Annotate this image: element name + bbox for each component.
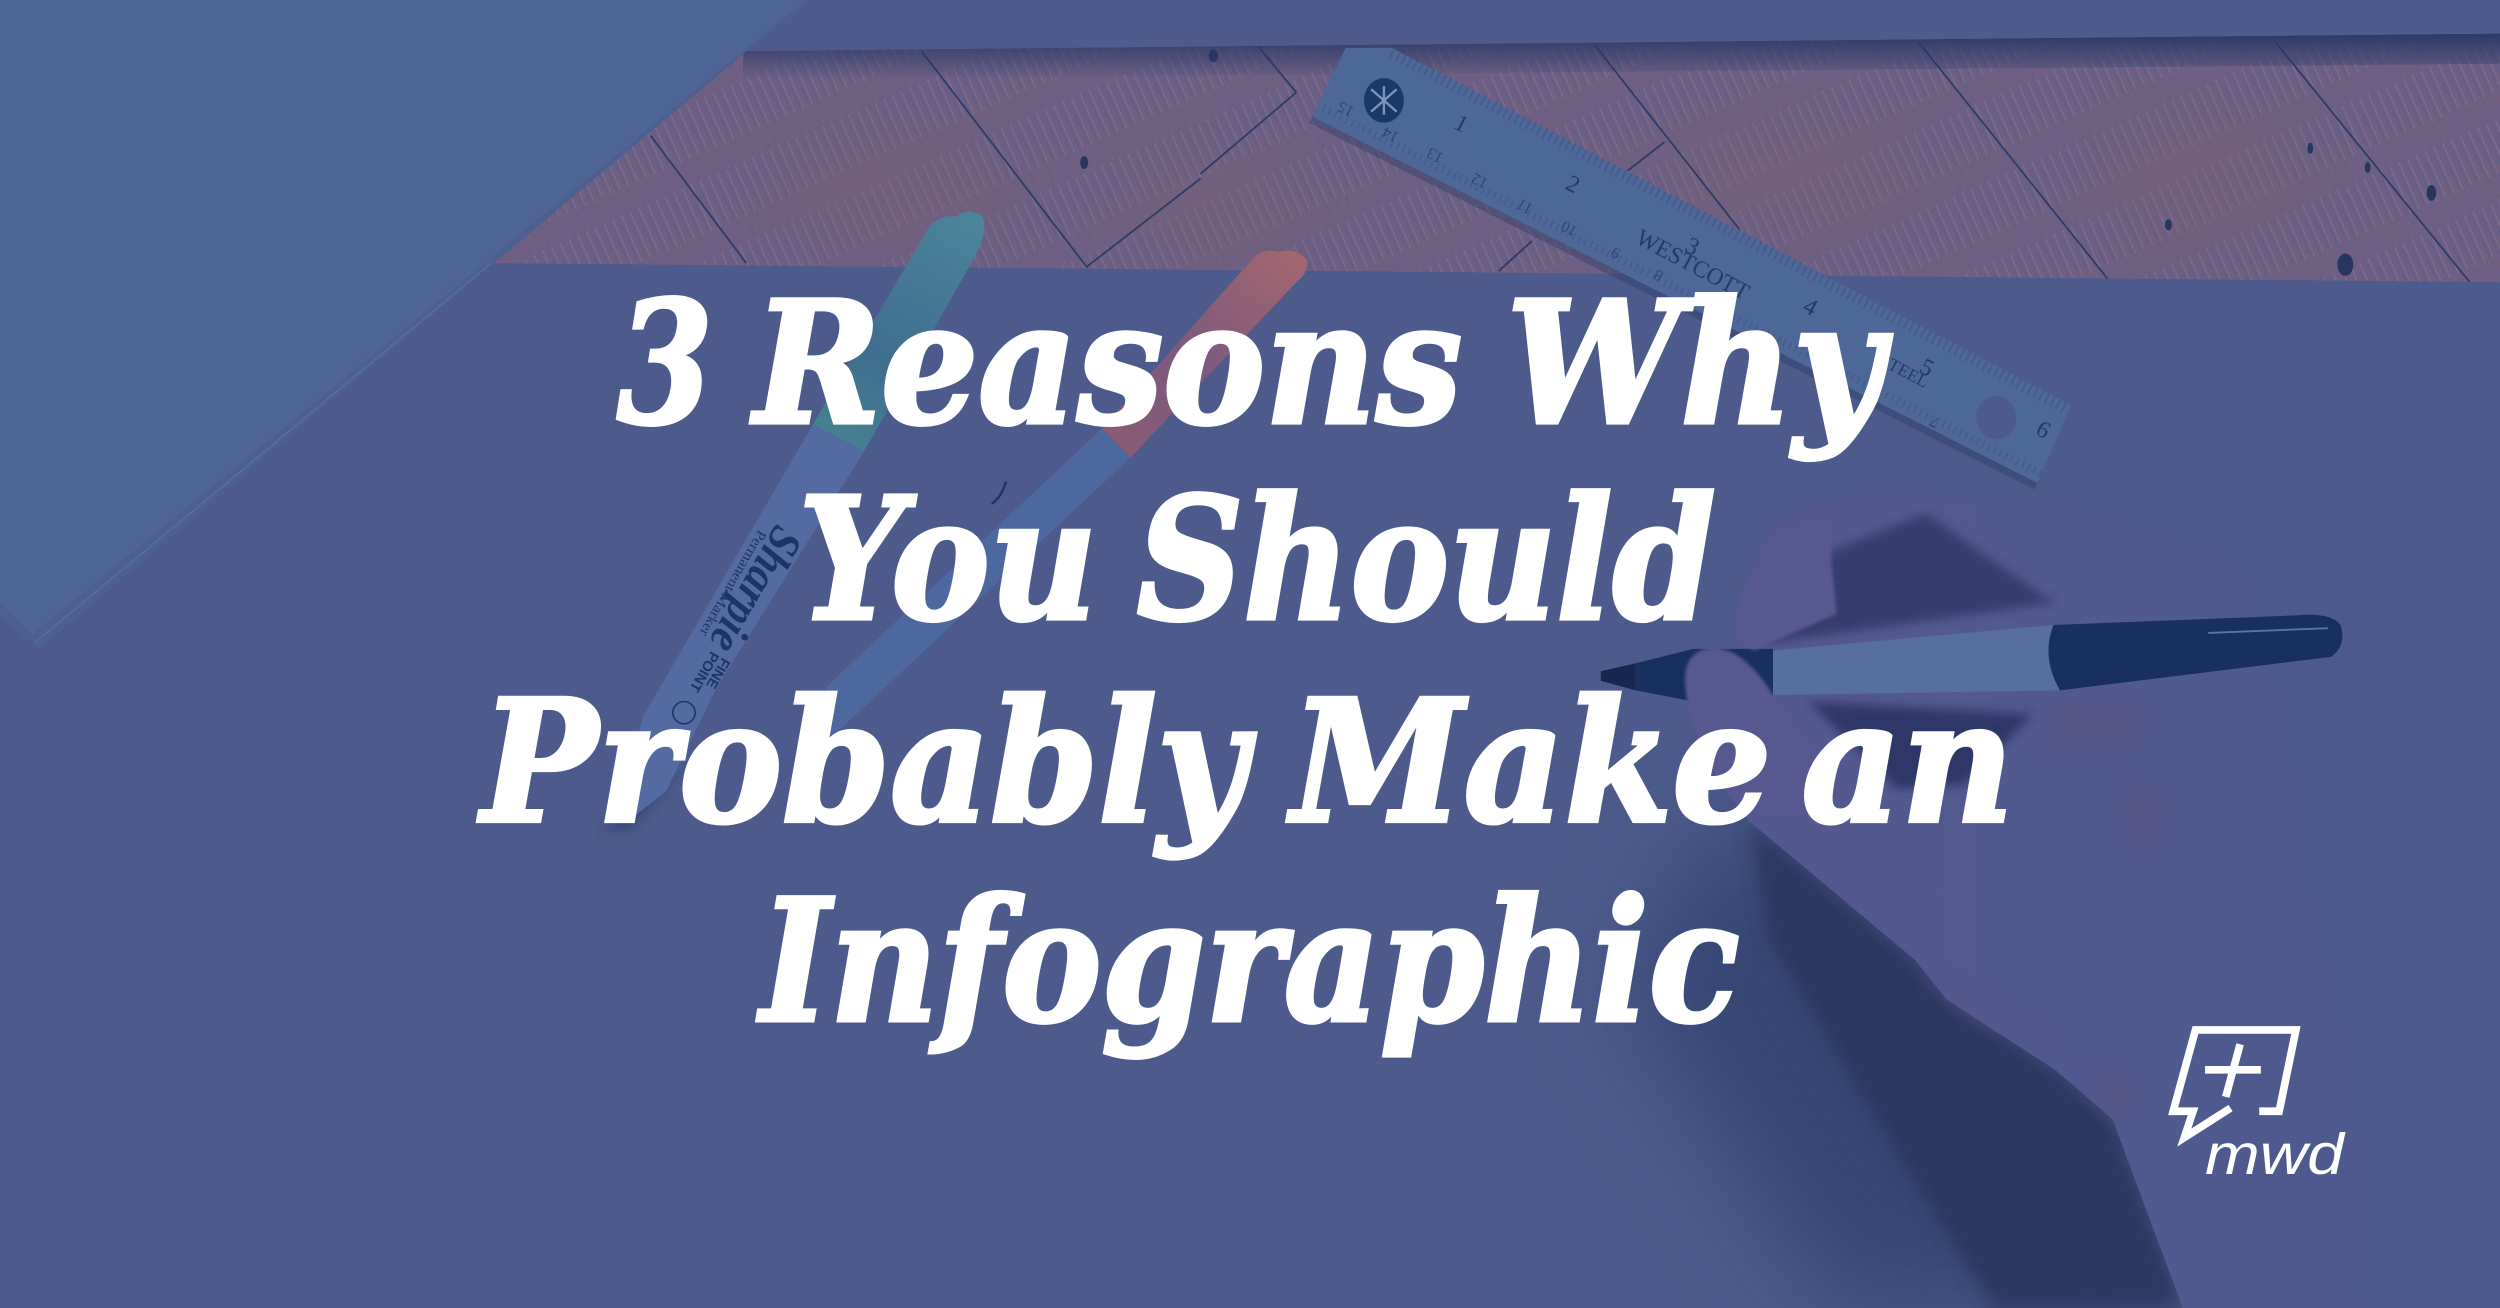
green marker [603,212,984,834]
ruler hole [1976,396,2016,439]
marker held in hand [1601,615,2342,702]
green marker: Permanent Marker [696,527,769,639]
logo: mwd [2173,1030,2346,1187]
thumb and finger [1685,520,1837,813]
title line 2 [799,460,1716,659]
red marker [810,251,1307,749]
reddish creases [1897,702,2168,1124]
wooden floor [478,24,2500,295]
white paper stack top-left [0,0,810,650]
green marker: FINE [702,655,733,691]
logo wordmark: mwd [2205,1123,2346,1187]
ruler [1309,48,2071,489]
ruler markings: 15 [1335,97,1357,120]
title line 1: 3 [617,264,713,463]
title line 1: Why [1507,264,1892,463]
title line 3: Make [1287,662,1771,861]
ruler markings [1335,97,2054,445]
ruler markings: 10 [1558,217,1580,239]
shadow under hand [1626,797,2183,1307]
ruler markings: 5 [1915,354,1938,382]
ruler markings: WESTCOTT [1631,225,1754,306]
top paper band [743,0,2500,80]
ruler markings: 6 [2032,416,2054,445]
ruler markings: 2 [1561,170,1584,199]
ruler markings: 1 [1450,110,1472,138]
brown paper sheet [0,263,2500,1308]
title line 3: Probably [478,662,1256,861]
title line 1: Reasons [751,264,1462,463]
title line 3: an [1802,662,2014,861]
ruler markings: 12 [1469,169,1491,192]
title [478,264,2014,1060]
green marker: POINT [686,648,721,695]
title line 2: You [799,460,1097,659]
ruler markings: 13 [1424,144,1446,166]
ruler markings: 14 [1380,123,1402,145]
ruler logo dot [1364,78,1404,123]
title line 4: Infographic [757,861,1739,1060]
ruler markings: STEEL [1876,349,1932,392]
hand [1601,493,2468,1308]
ruler markings: 9 [1608,243,1623,262]
title line 3 [478,662,2014,861]
ruler markings: 7 [1927,412,1942,431]
ruler markings: 11 [1514,195,1536,217]
title line 1 [617,264,1892,463]
title line 2: Should [1137,460,1716,659]
ruler markings: 3 [1681,233,1704,261]
ruler markings: 8 [1651,265,1666,284]
ruler markings: 4 [1799,293,1822,322]
hollow of hand [1760,513,2054,789]
icon: speech bubble with plus [2173,1030,2296,1138]
green marker: Sharpie [698,517,813,663]
